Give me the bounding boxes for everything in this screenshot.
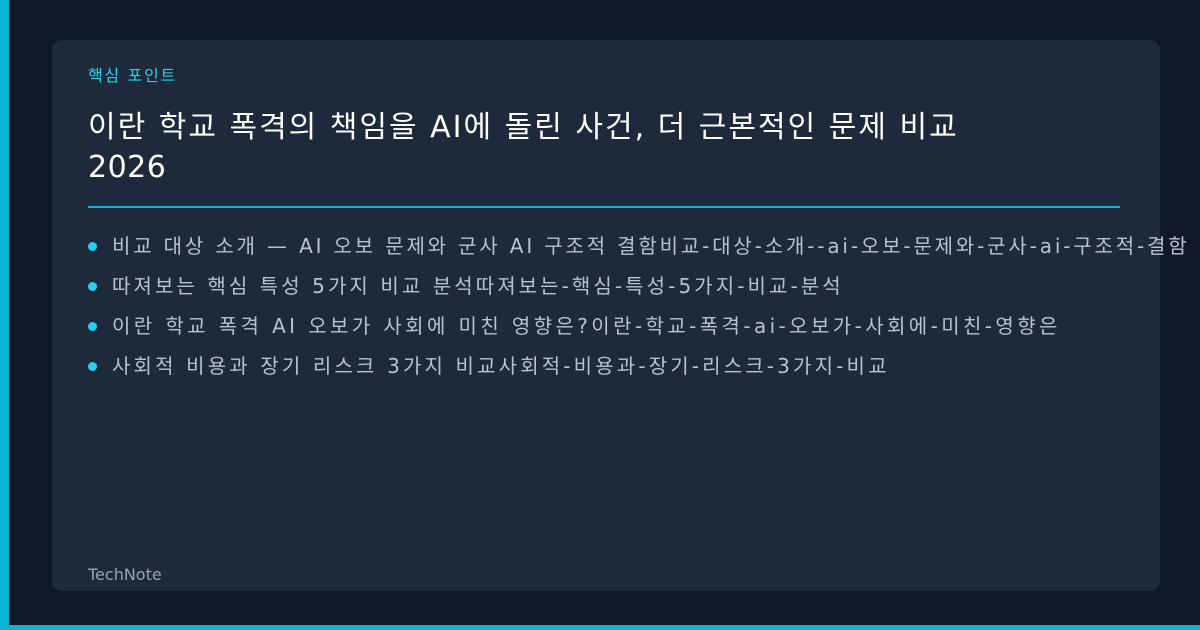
title: 2026 bbox=[88, 150, 166, 185]
title: 이란 학교 폭격의 책임을 AI에 돌린 사건, 더 근본적인 문제 비교 bbox=[88, 110, 959, 145]
footer: TechNote bbox=[88, 565, 162, 584]
bullet list bbox=[88, 234, 1190, 378]
bullet 1: 비교 대상 소개 — AI 오보 문제와 군사 AI 구조적 결함비교-대상-소개--ai-오보-문제와-군사-ai-구조적-결함 bbox=[112, 234, 1190, 258]
bullet 3: 이란 학교 폭격 AI 오보가 사회에 미친 영향은?이란-학교-폭격-ai-오보가-사회에-미친-영향은 bbox=[112, 314, 1061, 338]
bullet 2: 따져보는 핵심 특성 5가지 비교 분석따져보는-핵심-특성-5가지-비교-분석 bbox=[112, 274, 844, 298]
bullet 4: 사회적 비용과 장기 리스크 3가지 비교사회적-비용과-장기-리스크-3가지-비교 bbox=[112, 354, 890, 378]
label: key points: 핵심 포인트 bbox=[88, 66, 177, 85]
title bbox=[88, 110, 959, 185]
